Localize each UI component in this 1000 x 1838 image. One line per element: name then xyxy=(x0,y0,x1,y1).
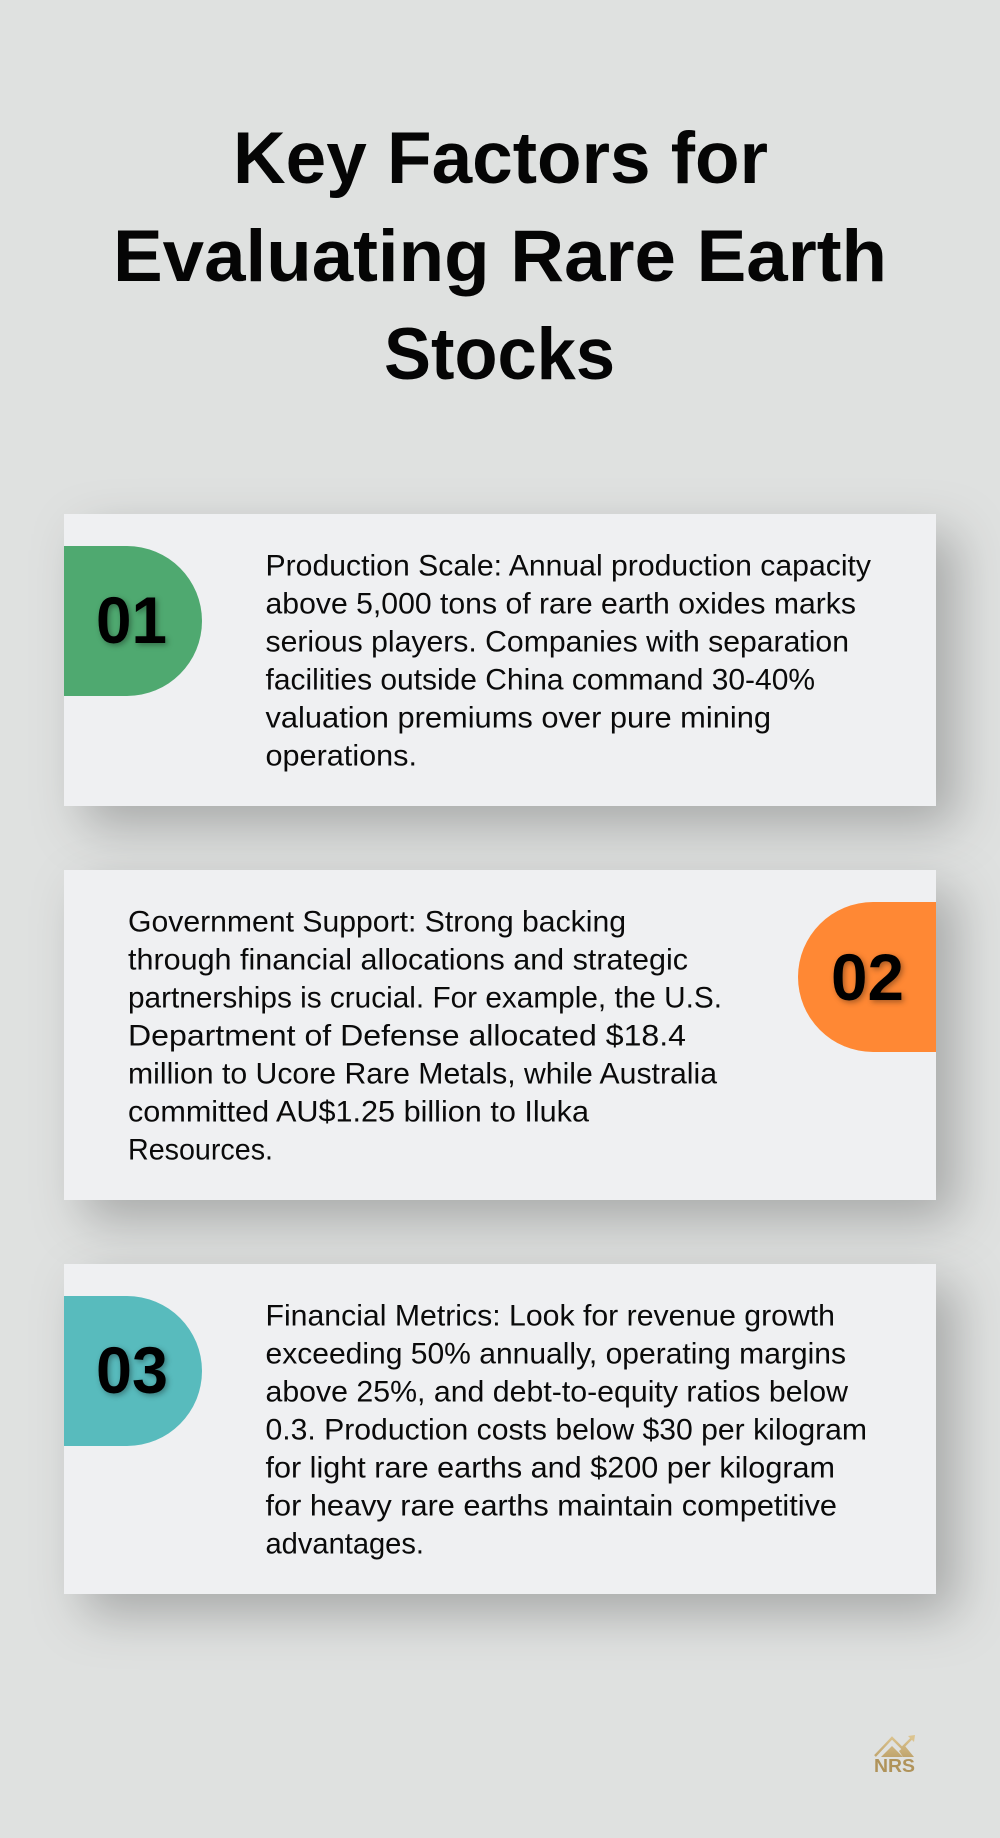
text block: production scale: facilities outside China command 30-40% xyxy=(266,664,815,696)
text block: financial metrics: advantages. xyxy=(266,1528,424,1560)
text block: financial metrics: above 25%, and debt-to-equity ratios below xyxy=(266,1376,849,1408)
badge: 01 xyxy=(64,546,202,696)
text block: production scale: Production Scale: Annual production capacity xyxy=(266,550,871,582)
text block: government support: Resources. xyxy=(128,1134,273,1166)
panel: government support xyxy=(64,870,936,1200)
title: Stocks xyxy=(384,314,615,395)
text block: government support: million to Ucore Rare Metals, while Australia xyxy=(128,1058,718,1090)
text block: production scale: above 5,000 tons of rare earth oxides marks xyxy=(266,588,856,620)
panel: production scale xyxy=(64,514,936,806)
text block: government support: through financial allocations and strategic xyxy=(128,944,688,976)
text block: financial metrics xyxy=(266,1300,867,1560)
text block: financial metrics: 0.3. Production costs below $30 per kilogram xyxy=(266,1414,867,1446)
text block: financial metrics: for heavy rare earths maintain competitive xyxy=(266,1490,837,1522)
title: Key Factors for xyxy=(233,118,768,199)
badge: 02 xyxy=(798,902,936,1052)
panel: financial metrics xyxy=(64,1264,936,1594)
text block: government support: committed AU$1.25 billion to Iluka xyxy=(128,1096,590,1128)
title: Evaluating Rare Earth xyxy=(113,216,887,297)
badge: 03: 03 xyxy=(96,1333,168,1407)
text block: production scale: valuation premiums over pure mining xyxy=(266,702,771,734)
badge: 01: 01 xyxy=(96,583,167,657)
text block: government support: Government Support: Strong backing xyxy=(128,906,626,938)
text block: government support: Department of Defense allocated $18.4 xyxy=(128,1020,686,1052)
text block: production scale xyxy=(266,550,871,772)
text block: government support: partnerships is crucial. For example, the U.S. xyxy=(128,982,722,1014)
icon: NRS logo: NRS xyxy=(874,1756,915,1776)
icon: NRS logo xyxy=(874,1735,915,1776)
text block: production scale: serious players. Companies with separation xyxy=(266,626,849,658)
badge: 02: 02 xyxy=(831,940,904,1014)
text block: financial metrics: for light rare earths and $200 per kilogram xyxy=(266,1452,835,1484)
text block: production scale: operations. xyxy=(266,740,417,772)
title xyxy=(113,118,887,395)
text block: financial metrics: Financial Metrics: Look for revenue growth xyxy=(266,1300,835,1332)
text block: government support xyxy=(128,906,722,1166)
badge: 03 xyxy=(64,1296,202,1446)
text block: financial metrics: exceeding 50% annually, operating margins xyxy=(266,1338,846,1370)
